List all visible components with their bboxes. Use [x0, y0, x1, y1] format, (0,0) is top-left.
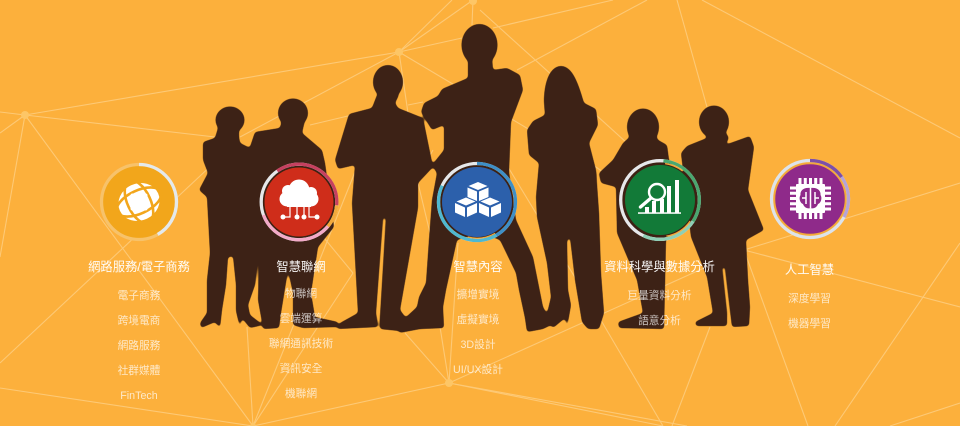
person: man 7: [681, 106, 764, 327]
heading: 智慧內容: [453, 259, 503, 274]
person: man 3: [335, 65, 433, 331]
icon: cubes badge: [424, 149, 530, 255]
topic list: FinTech: [120, 390, 158, 402]
heading: 資料科學與數據分析: [604, 260, 715, 274]
topic list: 3D設計: [460, 338, 496, 351]
heading: 人工智慧: [785, 262, 834, 277]
topic list: 電子商務: [118, 289, 161, 302]
network nodes: [21, 0, 748, 426]
topic list: 跨境電商: [118, 314, 161, 327]
topic list: 網路服務: [118, 339, 161, 352]
topic list: [788, 292, 831, 330]
person: woman 5: [527, 66, 604, 329]
topic list: 機聯網: [285, 387, 317, 400]
person: woman 1: [199, 106, 263, 328]
heading: 智慧聯網: [276, 259, 326, 274]
topic list: [269, 287, 333, 400]
topic list: [453, 288, 503, 376]
topic list: 深度學習: [788, 292, 831, 305]
category: e-commerce: [88, 164, 190, 402]
icon: analytics badge: [606, 146, 714, 254]
topic list: 社群媒體: [118, 364, 161, 377]
topic list: 資訊安全: [280, 362, 323, 375]
topic list: 巨量資料分析: [627, 289, 692, 302]
icon: AI chip badge: [772, 160, 848, 238]
silhouettes of people: [199, 24, 764, 333]
topic list: 物聯網: [285, 287, 317, 300]
category: data science: [604, 146, 715, 327]
topic list: 擴增實境: [457, 288, 500, 301]
category: smart content: [424, 149, 530, 376]
topic list: [627, 289, 692, 327]
topic list: UI/UX設計: [453, 363, 503, 376]
category: IoT: [246, 149, 352, 400]
topic list: 機器學習: [788, 317, 831, 330]
icon: cloud badge: [246, 149, 352, 255]
category: AI: [772, 160, 848, 330]
topic list: 雲端運算: [280, 312, 323, 325]
person: man 2: [250, 98, 338, 329]
topic list: [118, 289, 161, 402]
person: woman 6: [599, 108, 690, 329]
person: tall man: [399, 24, 551, 333]
heading: 網路服務/電子商務: [88, 259, 190, 274]
topic list: 虛擬實境: [457, 313, 500, 326]
topic list: 語意分析: [638, 314, 681, 327]
topic list: 聯網通訊技術: [269, 337, 333, 350]
icon: globe badge: [102, 164, 176, 240]
